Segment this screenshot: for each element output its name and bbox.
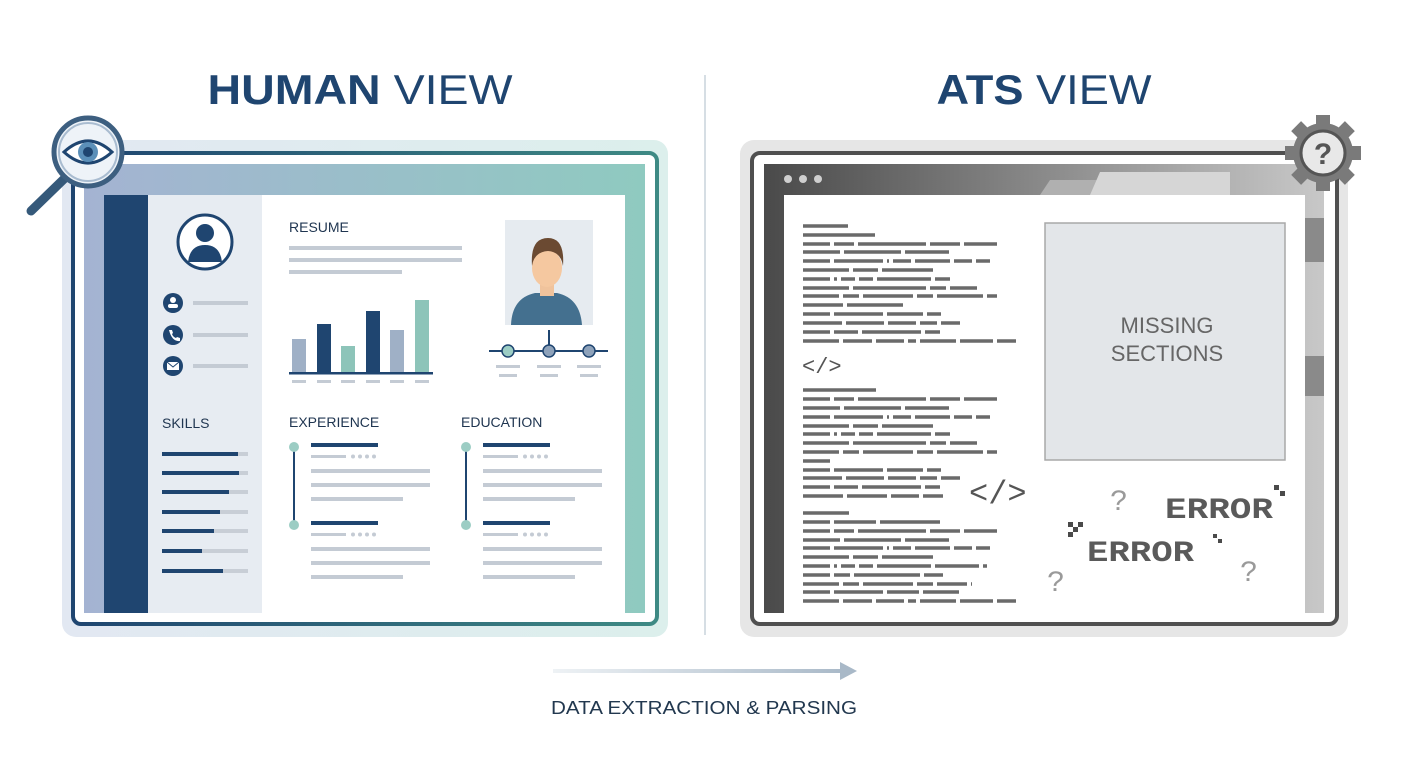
icon: magnifier with eye	[31, 118, 122, 211]
box: missing sections: SECTIONS	[1111, 341, 1223, 366]
photo	[505, 220, 593, 325]
timeline	[489, 330, 608, 377]
skill bars	[162, 452, 248, 573]
title: human view: HUMAN VIEW	[208, 66, 513, 113]
heading: resume: RESUME	[289, 219, 349, 235]
caption: DATA EXTRACTION & PARSING	[551, 698, 857, 718]
box: missing sections	[1045, 223, 1285, 460]
icon: avatar	[178, 215, 232, 269]
icon: gear with question mark	[1285, 115, 1361, 191]
text block: garbled lines	[803, 226, 1016, 601]
box: missing sections: MISSING	[1121, 313, 1213, 338]
icon: code tag large: </>	[969, 476, 1027, 513]
error messages: ERROR	[1087, 537, 1194, 571]
icon: code tag small: </>	[802, 355, 842, 380]
bar chart	[289, 300, 433, 383]
heading: skills: SKILLS	[162, 415, 209, 431]
panel: human view resume	[62, 140, 668, 637]
section: experience: EXPERIENCE	[289, 414, 379, 430]
error messages: ERROR	[1165, 494, 1273, 528]
error messages	[1047, 485, 1285, 601]
title: ats view: ATS VIEW	[936, 66, 1152, 113]
panel: ats view	[740, 140, 1348, 637]
contact icons	[163, 293, 183, 376]
error messages: ?	[1240, 557, 1258, 591]
section: education: EDUCATION	[461, 414, 542, 430]
section: experience	[289, 414, 430, 579]
icon: gear with question mark: ?	[1314, 138, 1332, 171]
section: education	[461, 414, 602, 579]
window dots	[784, 175, 822, 183]
error messages: ?	[1047, 567, 1065, 601]
arrow	[553, 662, 857, 680]
error messages: ?	[1110, 486, 1128, 520]
